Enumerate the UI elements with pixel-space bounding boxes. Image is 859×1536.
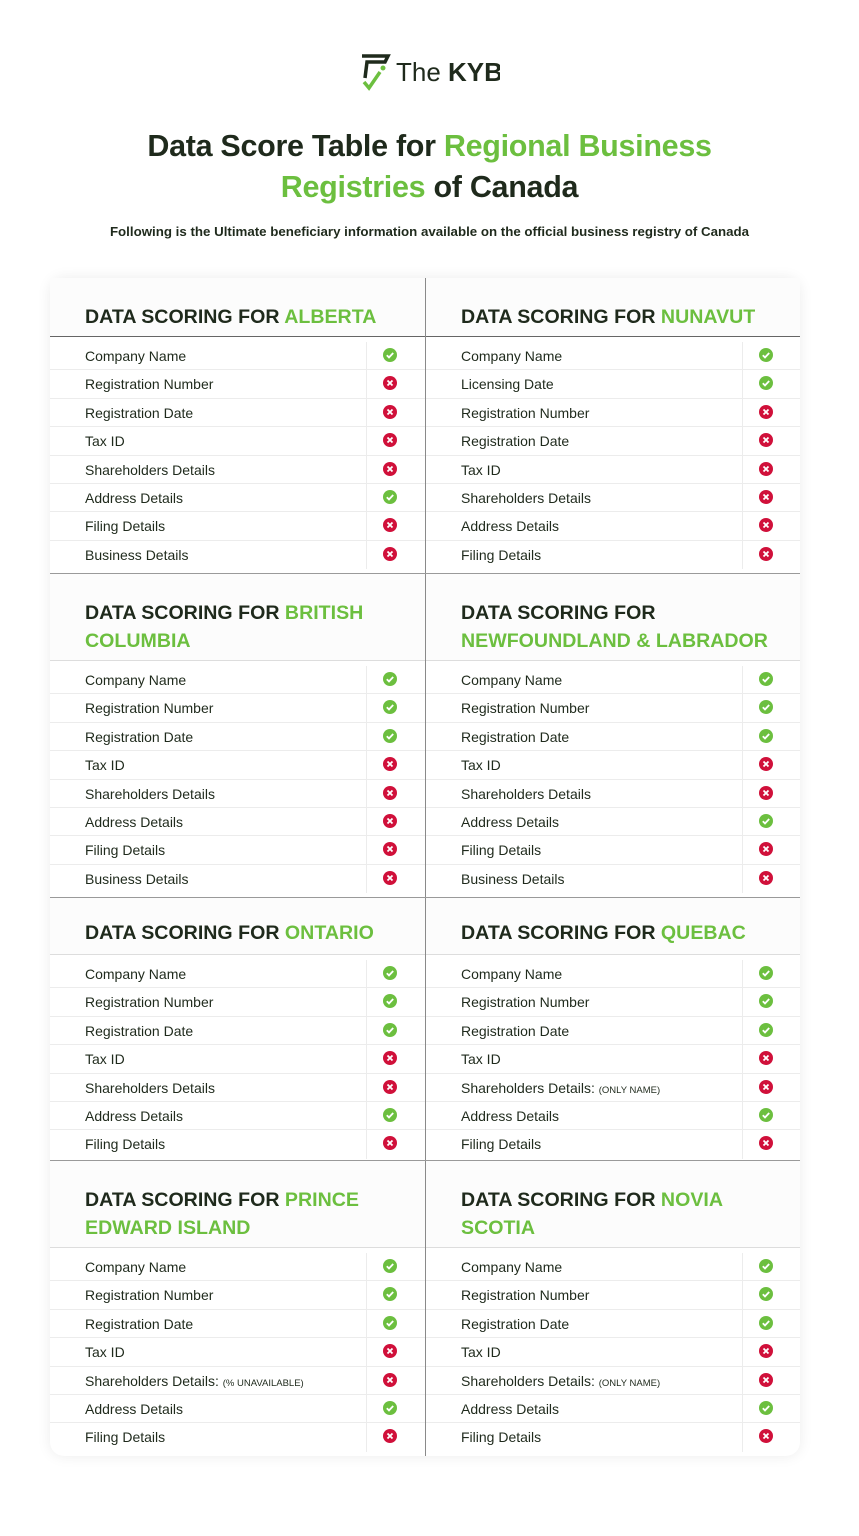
panel: Nova Scotia: Address Details — [461, 1401, 559, 1417]
panel: Prince Edward Island: Registration Number — [85, 1287, 213, 1303]
panel: Quebec: Filing Details — [461, 1136, 541, 1152]
panel: Prince Edward Island: Registration Date — [85, 1316, 193, 1332]
panel: Nunavut: Shareholders Details — [461, 490, 591, 506]
panel: Newfoundland & Labrador: Tax ID — [461, 757, 501, 773]
panel: Newfoundland & Labrador: DATA SCORING FOR — [461, 602, 655, 624]
panel: Nunavut: Address Details — [461, 518, 559, 534]
section: Alberta / Nunavut — [50, 278, 800, 574]
panel: Prince Edward Island: Company Name — [85, 1259, 186, 1275]
subtitle: Following is the Ultimate beneficiary information available on the official business registry of Canada — [110, 224, 749, 239]
panel: Alberta: Company Name — [85, 348, 186, 364]
panel: Nova Scotia: Tax ID — [461, 1344, 501, 1360]
panel: Newfoundland & Labrador: Address Details — [461, 814, 559, 830]
panel: Nova Scotia — [425, 1161, 800, 1456]
panel: Alberta: Tax ID — [85, 433, 125, 449]
panel: Alberta: Shareholders Details — [85, 462, 215, 478]
panel: Alberta: Registration Number — [85, 376, 213, 392]
panel: Ontario: Registration Date — [85, 1023, 193, 1039]
table card — [50, 278, 800, 1456]
panel: Newfoundland & Labrador: Registration Number — [461, 700, 589, 716]
panel: Alberta: Address Details — [85, 490, 183, 506]
panel: Nunavut: Filing Details — [461, 547, 541, 563]
panel: Nunavut: Tax ID — [461, 462, 501, 478]
panel: Prince Edward Island — [50, 1189, 425, 1452]
panel: Nova Scotia: Company Name — [461, 1259, 562, 1275]
panel: Quebec: Address Details — [461, 1108, 559, 1124]
panel: Alberta: Registration Date — [85, 405, 193, 421]
panel: Prince Edward Island: Filing Details — [85, 1429, 165, 1445]
title: Data Score Table for Regional Business — [147, 129, 712, 163]
panel: Ontario: Filing Details — [85, 1136, 165, 1152]
panel: Nunavut: Registration Date — [461, 433, 569, 449]
panel: Ontario: Shareholders Details — [85, 1080, 215, 1096]
panel: Nunavut: DATA SCORING FOR NUNAVUT — [461, 306, 755, 328]
panel: British Columbia: Registration Number — [85, 700, 213, 716]
panel: Prince Edward Island: DATA SCORING FOR PRINCE — [85, 1189, 359, 1211]
panel: British Columbia — [50, 602, 425, 893]
panel: Prince Edward Island: Tax ID — [85, 1344, 125, 1360]
panel: Quebec: Registration Date — [461, 1023, 569, 1039]
panel: Newfoundland & Labrador: Filing Details — [461, 842, 541, 858]
panel: Alberta: Business Details — [85, 547, 188, 563]
logo — [362, 54, 500, 91]
panel: Ontario — [50, 922, 425, 1159]
panel: British Columbia: Registration Date — [85, 729, 193, 745]
panel: Nunavut: Company Name — [461, 348, 562, 364]
panel: Alberta: Filing Details — [85, 518, 165, 534]
panel: British Columbia: Shareholders Details — [85, 786, 215, 802]
panel: Quebec: Shareholders Details: (ONLY NAME) — [461, 1080, 660, 1096]
panel: Newfoundland & Labrador: Registration Date — [461, 729, 569, 745]
panel: Newfoundland & Labrador: Business Details — [461, 871, 564, 887]
panel: Quebec — [425, 898, 800, 1160]
panel: Newfoundland & Labrador: NEWFOUNDLAND & LABRADOR — [461, 630, 768, 652]
title: Registries of Canada — [281, 170, 578, 204]
panel: Quebec: Tax ID — [461, 1051, 501, 1067]
section: Ontario / Quebec — [50, 898, 800, 1161]
panel: British Columbia: Tax ID — [85, 757, 125, 773]
panel: Nunavut: Registration Number — [461, 405, 589, 421]
panel: Nunavut: Licensing Date — [461, 376, 554, 392]
panel: Quebec: Registration Number — [461, 994, 589, 1010]
panel: British Columbia: Address Details — [85, 814, 183, 830]
section: PEI / Nova Scotia — [50, 1161, 800, 1456]
panel: Ontario: DATA SCORING FOR ONTARIO — [85, 922, 374, 944]
panel: Quebec: Company Name — [461, 966, 562, 982]
panel: Nunavut — [425, 278, 800, 573]
logo: The KYB — [396, 57, 500, 87]
panel: Prince Edward Island: Address Details — [85, 1401, 183, 1417]
panel: Nova Scotia: DATA SCORING FOR NOVIA — [461, 1189, 723, 1211]
panel: Quebec: DATA SCORING FOR QUEBAC — [461, 922, 746, 944]
panel: British Columbia: DATA SCORING FOR BRITISH — [85, 602, 363, 624]
panel: British Columbia: COLUMBIA — [85, 630, 191, 652]
panel: Ontario: Registration Number — [85, 994, 213, 1010]
panel: Prince Edward Island: Shareholders Details: (% UNAVAILABLE) — [85, 1373, 304, 1389]
section: British Columbia / Newfoundland — [50, 574, 800, 898]
panel: Alberta: DATA SCORING FOR ALBERTA — [85, 306, 376, 328]
panel: Nova Scotia: SCOTIA — [461, 1217, 535, 1239]
title — [147, 129, 712, 204]
panel: Newfoundland & Labrador: Company Name — [461, 672, 562, 688]
panel: British Columbia: Business Details — [85, 871, 188, 887]
panel: Prince Edward Island: EDWARD ISLAND — [85, 1217, 250, 1239]
panel: Ontario: Company Name — [85, 966, 186, 982]
panel: Ontario: Tax ID — [85, 1051, 125, 1067]
panel: Nova Scotia: Filing Details — [461, 1429, 541, 1445]
panel: Alberta — [50, 306, 425, 569]
panel: Nova Scotia: Registration Date — [461, 1316, 569, 1332]
panel: British Columbia: Filing Details — [85, 842, 165, 858]
panel: Nova Scotia: Shareholders Details: (ONLY NAME) — [461, 1373, 660, 1389]
panel: Nova Scotia: Registration Number — [461, 1287, 589, 1303]
panel: British Columbia: Company Name — [85, 672, 186, 688]
panel: Newfoundland & Labrador: Shareholders Details — [461, 786, 591, 802]
panel: Ontario: Address Details — [85, 1108, 183, 1124]
panel: Newfoundland & Labrador — [425, 574, 800, 897]
